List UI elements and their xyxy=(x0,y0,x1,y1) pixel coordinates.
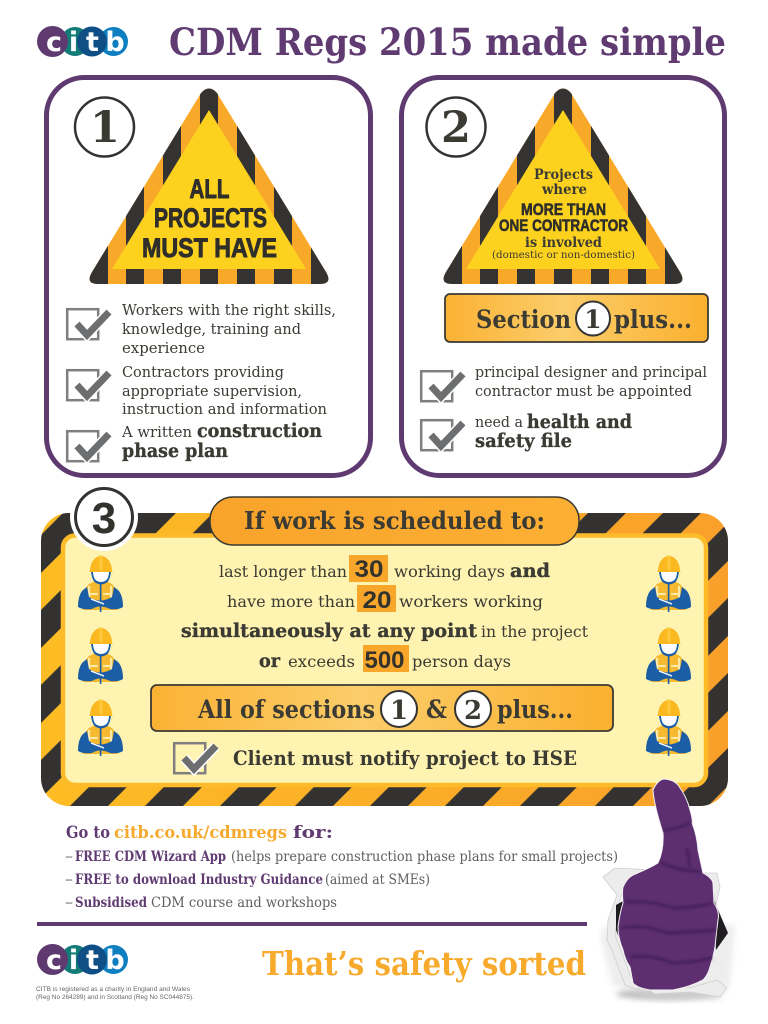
conditions text: person days xyxy=(412,652,511,671)
number badge 1 xyxy=(75,98,134,156)
panel 3: hazard framed notification section xyxy=(41,483,728,806)
checklist item: health and safety file: safety file xyxy=(475,430,572,452)
footer links: – xyxy=(65,895,73,911)
conditions text: in the project xyxy=(481,622,589,641)
checklist item: appointments: principal designer and principal xyxy=(475,363,707,381)
footer links: Subsidised xyxy=(75,895,147,911)
banner: all of sections: All of sections xyxy=(197,695,375,724)
banner: section 1 plus: plus... xyxy=(614,305,692,334)
logo: CITB bottom: t xyxy=(86,945,99,976)
workers left xyxy=(78,556,123,756)
pill heading: If work is scheduled to: xyxy=(244,506,545,535)
checklist item: construction phase plan xyxy=(67,420,322,462)
footer links: (helps prepare construction phase plans for small projects) xyxy=(231,849,618,865)
checklist item: skills xyxy=(67,301,336,357)
footer links: CDM course and workshops xyxy=(151,895,337,911)
banner: all of sections xyxy=(151,685,613,731)
footer links: (aimed at SMEs) xyxy=(325,872,430,888)
checklist item: skills: Workers with the right skills, xyxy=(122,301,336,319)
conditions text: last longer than xyxy=(219,562,347,581)
checklist item: construction phase plan: construction xyxy=(197,420,322,442)
checklist item: construction phase plan: A written xyxy=(121,423,192,441)
footer links: FREE CDM Wizard App xyxy=(75,849,226,865)
logo: CITB top xyxy=(37,26,128,58)
checklist item: skills: knowledge, training and xyxy=(122,320,301,338)
icon: warning triangle 2: where xyxy=(541,182,587,198)
logo: CITB top: b xyxy=(105,27,125,58)
icon: warning triangle 2: (domestic or non-domestic) xyxy=(492,250,635,261)
logo: CITB top: i xyxy=(69,27,78,58)
number badge 1: 1 xyxy=(90,103,120,153)
conditions text: workers working xyxy=(399,592,543,611)
conditions text xyxy=(181,555,589,674)
panel 2: more than one contractor xyxy=(402,78,724,476)
checklist item: notify HSE: Client must notify project to HSE xyxy=(233,746,577,770)
footer links: citb.co.uk/cdmregs xyxy=(114,823,287,843)
conditions text: 20 xyxy=(362,587,392,614)
footer links xyxy=(65,823,618,911)
icon: warning triangle 2: is involved xyxy=(525,235,602,251)
logo: CITB bottom: c xyxy=(46,945,62,976)
banner: section 1 plus xyxy=(445,294,708,342)
conditions text: working days xyxy=(394,562,505,581)
checklist item: construction phase plan: phase plan xyxy=(122,440,228,462)
charity note xyxy=(36,987,194,1001)
checklist item: health and safety file: health and xyxy=(527,411,632,433)
footer links: for: xyxy=(293,823,333,843)
checklist item: skills: experience xyxy=(122,339,205,357)
checklist item: supervision: Contractors providing xyxy=(122,363,284,381)
icon: purple thumbs up through torn paper xyxy=(600,779,735,1000)
checklist item: appointments: contractor must be appointed xyxy=(475,382,692,400)
number badge 2: 2 xyxy=(441,103,471,153)
workers right xyxy=(646,556,691,756)
checklist item: appointments xyxy=(421,363,707,401)
icon: warning triangle 2: ONE CONTRACTOR xyxy=(499,216,628,235)
checklist item: notify HSE xyxy=(174,743,577,773)
banner: all of sections: plus... xyxy=(497,695,573,724)
footer links: FREE to download Industry Guidance xyxy=(75,872,323,888)
conditions text: simultaneously at any point xyxy=(181,620,477,642)
logo: CITB top: c xyxy=(46,27,62,58)
checklist item: health and safety file: need a xyxy=(475,413,523,431)
checklist item: supervision: instruction and information xyxy=(122,400,327,418)
icon: warning triangle 2 xyxy=(439,84,687,286)
conditions text: 500 xyxy=(364,647,404,674)
checklist item: health and safety file xyxy=(421,411,632,452)
divider rule xyxy=(37,922,587,926)
tagline: That’s safety sorted xyxy=(262,944,586,983)
banner: all of sections: & xyxy=(426,695,447,724)
banner: section 1 plus: 1 xyxy=(584,305,602,334)
logo: CITB bottom xyxy=(37,944,128,976)
logo: CITB bottom: i xyxy=(69,945,78,976)
conditions text: 30 xyxy=(354,556,384,583)
footer links: – xyxy=(65,849,73,865)
banner: section 1 plus: Section xyxy=(476,305,571,334)
charity note: (Reg No 264289) and in Scotland (Reg No SC044875). xyxy=(36,995,194,1001)
conditions text: exceeds xyxy=(288,652,355,671)
number badge 3: 3 xyxy=(92,494,116,543)
logo: CITB top: t xyxy=(86,27,99,58)
number badge 3 xyxy=(70,483,138,551)
checklist item: supervision: appropriate supervision, xyxy=(122,382,302,400)
number badge 2 xyxy=(426,98,486,156)
icon: warning triangle 1: ALL xyxy=(190,174,230,204)
conditions text: and xyxy=(510,560,550,582)
banner: all of sections: 1 xyxy=(390,696,408,726)
footer links: – xyxy=(65,872,73,888)
footer links: Go to xyxy=(66,823,110,843)
banner: all of sections: 2 xyxy=(464,696,482,726)
icon: warning triangle 1: PROJECTS xyxy=(154,203,267,233)
checklist item: supervision xyxy=(67,363,327,418)
charity note: CITB is registered as a charity in England and Wales xyxy=(36,987,190,993)
icon: warning triangle 2: Projects xyxy=(534,167,593,183)
logo: CITB bottom: b xyxy=(105,945,125,976)
pill heading xyxy=(210,497,579,545)
icon: warning triangle 2: MORE THAN xyxy=(521,200,606,219)
conditions text: have more than xyxy=(227,592,355,611)
icon: warning triangle 1: MUST HAVE xyxy=(142,233,277,263)
title: CDM Regs 2015 made simple xyxy=(169,20,726,64)
icon: warning triangle 1 xyxy=(85,84,333,286)
panel 1: all projects xyxy=(46,78,370,476)
conditions text: or xyxy=(259,650,281,672)
